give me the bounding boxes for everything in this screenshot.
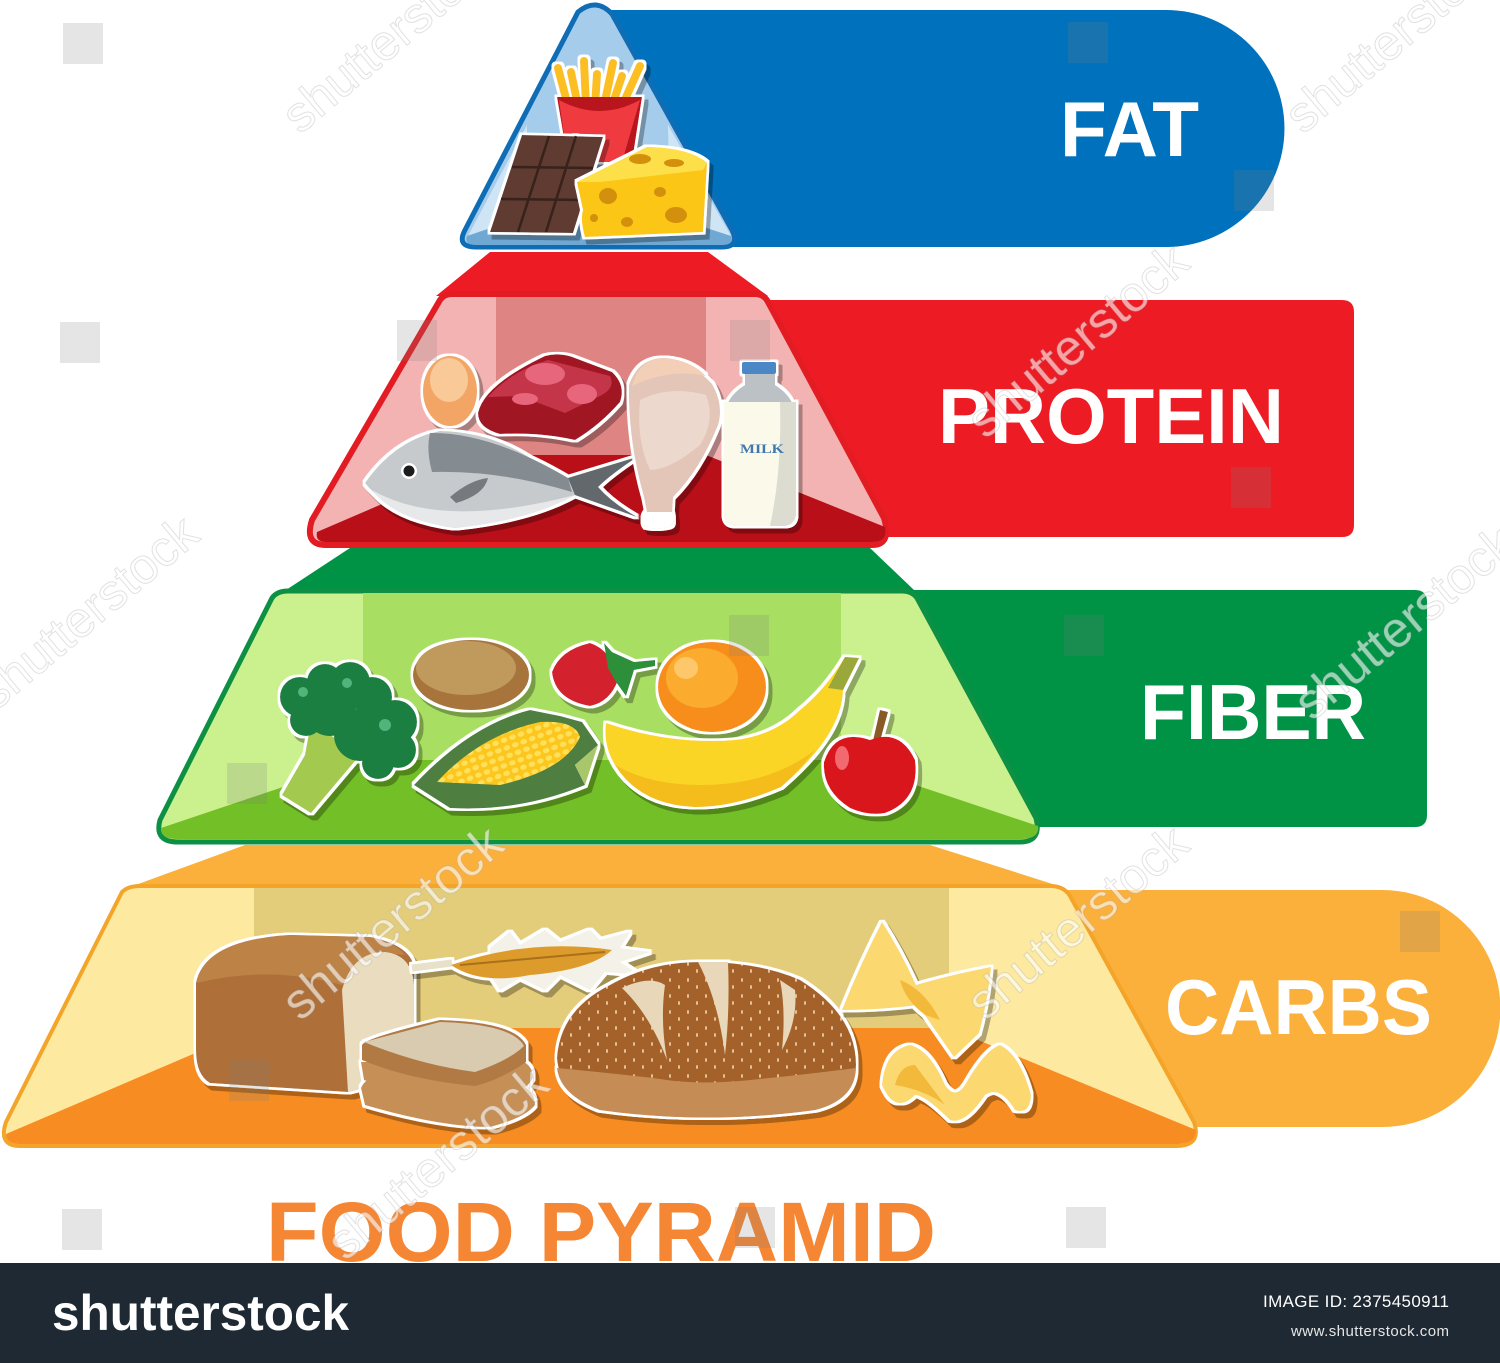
icon: bread slices [361,1020,535,1127]
icon: banana [605,657,859,807]
watermarks: shutterstock [956,814,1199,1030]
footer logo: shutterstock [52,1285,349,1341]
icon: apple [824,710,916,814]
panel: fat tier [462,5,1284,247]
carbs trapezoid [4,886,1196,1146]
watermarks: shutterstock [271,814,514,1030]
fiber floor [161,760,1038,839]
fiber trapezoid [159,591,1037,842]
protein back wall [496,297,706,455]
icon: bowtie pasta [842,922,991,1057]
fat label: FAT [1060,85,1199,173]
icon: potato [413,640,529,710]
site url: www.shutterstock.com [1290,1323,1449,1340]
carbs back wall [254,888,949,1028]
icon: fries [557,61,642,162]
icon: strawberry [552,643,655,706]
fat triangle [462,5,734,247]
fiber label: FIBER [1140,668,1366,756]
milk label: MILK [740,441,785,456]
carbs back lid [130,845,1062,887]
fiber back lid [286,548,914,590]
icon: round bread [557,962,856,1118]
fat side walls [468,125,731,236]
fat floor [466,218,732,245]
icon: egg [423,356,477,426]
carbs label: CARBS [1165,963,1432,1051]
title: FOOD PYRAMID [266,1185,936,1279]
icon: cheese [577,147,707,237]
icon: rotini pasta [882,1045,1031,1121]
icon: broccoli [280,662,417,813]
icon: corn [414,710,598,809]
fiber back wall [363,593,841,760]
panel: protein tier [310,252,1354,545]
icon: steak [478,354,622,440]
fat band [600,10,1284,247]
icon: fish [365,431,637,528]
image id: IMAGE ID: 2375450911 [1263,1292,1449,1311]
icon: milk bottle [724,362,796,526]
icon: chicken leg [629,358,720,528]
icon: orange [658,642,766,732]
protein band [760,300,1354,537]
footer bar [0,1263,1500,1363]
panel: fiber tier [159,548,1427,842]
watermarks: shutterstock [316,1054,559,1270]
icon: loaf [196,935,414,1092]
carbs band [1060,890,1500,1127]
panel: carbs tier [4,845,1500,1146]
fiber band [900,590,1427,827]
protein label: PROTEIN [938,372,1284,460]
protein floor [317,455,885,542]
icon: wheat [412,930,650,990]
protein trapezoid [310,294,886,545]
watermarks: shutterstock [956,232,1199,448]
carbs floor [6,1028,1196,1144]
icon: chocolate [490,135,603,233]
protein back lid [436,252,768,296]
